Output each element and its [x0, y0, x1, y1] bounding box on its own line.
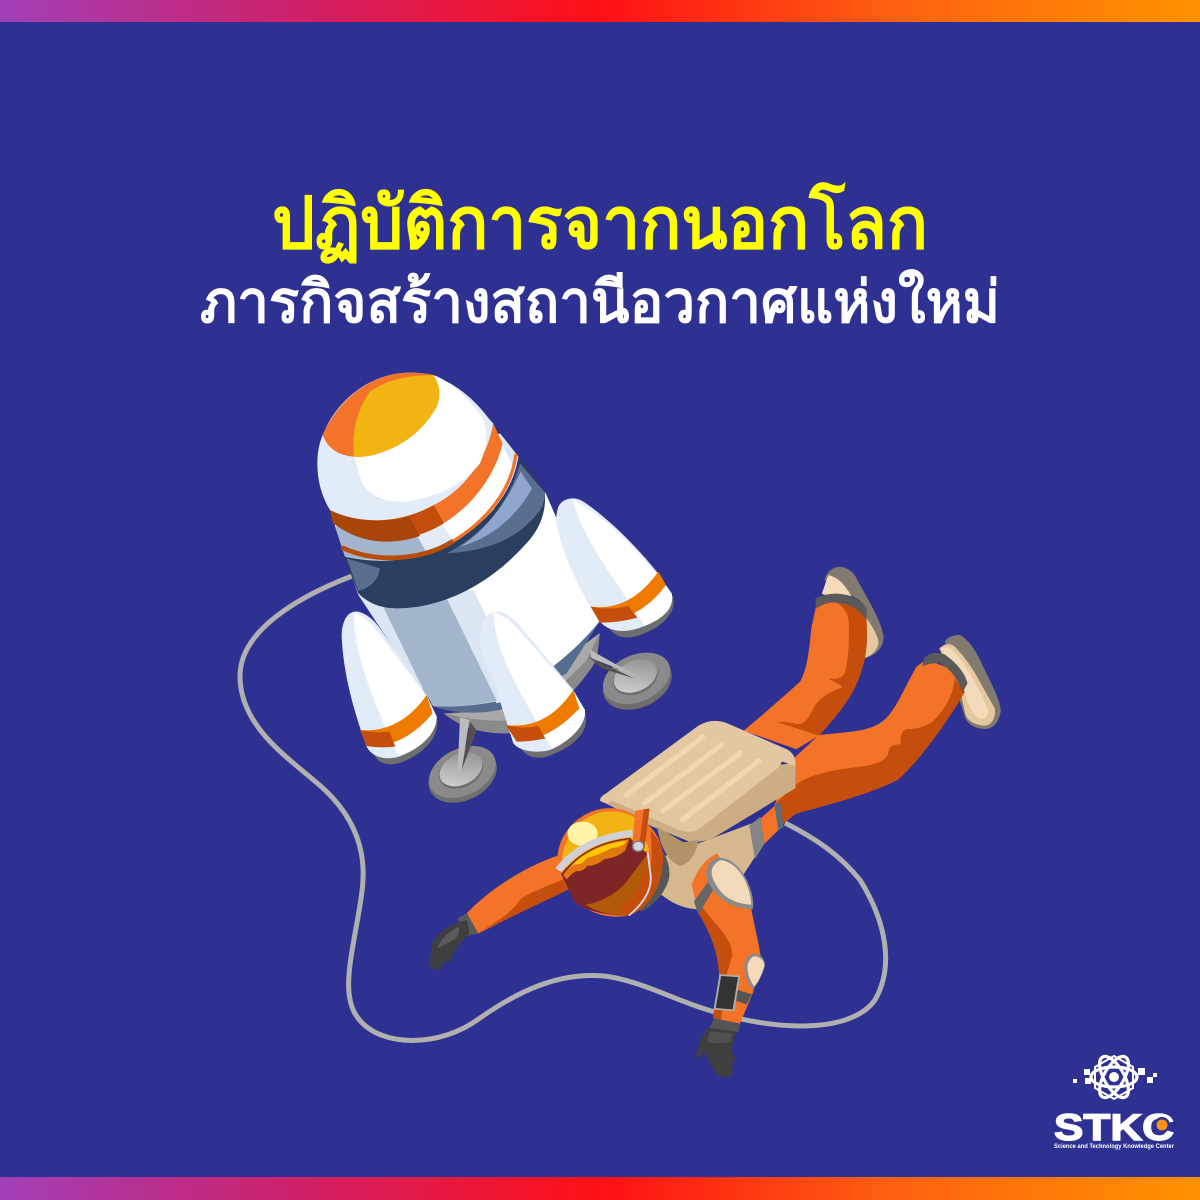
rocket hub highlight — [447, 633, 599, 721]
left cuff — [458, 913, 478, 936]
left glove highlight — [437, 927, 459, 949]
booster left — [342, 611, 437, 764]
booster middle — [480, 611, 586, 758]
left arm shadow — [476, 879, 569, 933]
helmet knob — [633, 841, 644, 851]
rocket collar shade — [335, 520, 427, 560]
rocket thin stripe orange — [453, 454, 516, 541]
visor edge shine — [619, 864, 650, 916]
rocket dome — [317, 373, 493, 520]
navy band shade — [447, 463, 545, 553]
logo orange dot — [1156, 1120, 1168, 1130]
rocket thin stripe dark — [342, 541, 453, 558]
leg one — [744, 602, 867, 749]
backpack underside — [657, 827, 698, 866]
tether cable — [240, 576, 886, 1040]
neck ring — [631, 851, 669, 912]
right arm — [692, 853, 761, 1024]
rocket — [317, 373, 680, 814]
rocket body blue shade — [367, 590, 497, 707]
helmet handle — [633, 808, 650, 847]
rocket body bottom rim — [430, 620, 601, 713]
landing foot left — [419, 717, 506, 814]
visor edge highlight — [629, 852, 651, 916]
rocket wide stripe dark — [330, 510, 420, 542]
booster right — [556, 498, 674, 638]
logo tagline: Science and Technology Knowledge Center — [1054, 1144, 1175, 1150]
right arm shadow — [697, 906, 732, 1020]
dome orange cap — [323, 373, 439, 457]
helmet handle shade — [639, 808, 650, 847]
wrist strap — [732, 989, 752, 1004]
elbow pad — [744, 954, 765, 989]
logo dot backing — [1154, 1117, 1170, 1133]
hip section — [761, 805, 783, 844]
bottom gradient bar — [0, 1177, 1200, 1200]
visor gold reflection — [569, 841, 627, 868]
top gradient bar — [0, 0, 1200, 22]
backpack side — [600, 763, 796, 842]
shoulder pad inner — [712, 860, 751, 905]
navy band — [343, 458, 545, 608]
navy band highlight — [460, 472, 532, 547]
wrist device — [715, 975, 739, 1010]
rocket collar pale — [408, 517, 454, 553]
subtitle: ภารกิจสร้างสถานีอวกาศแห่งใหม่ — [200, 268, 1000, 335]
rocket collar — [330, 433, 518, 561]
leg two shadow — [776, 678, 965, 825]
navy band left patch — [347, 558, 380, 591]
logo — [1054, 1052, 1175, 1150]
backpack top — [600, 721, 796, 832]
cuff one — [815, 594, 867, 620]
back foot one — [822, 567, 884, 659]
astronaut — [429, 567, 1001, 1078]
rocket body left edge — [345, 557, 430, 703]
leg two — [770, 660, 965, 825]
leg one shadow — [777, 602, 867, 736]
visor lower shine — [586, 854, 650, 916]
rocket wide stripe shade — [330, 505, 444, 540]
helmet rim — [558, 833, 633, 870]
left glove — [429, 920, 470, 971]
landing foot right — [588, 643, 680, 720]
back foot two — [939, 635, 1001, 729]
rocket body white — [345, 492, 601, 707]
title: ปฏิบัติการจากนอกโลก — [272, 180, 928, 264]
helmet — [557, 808, 663, 917]
logo wordmark: STKC — [1054, 1107, 1174, 1148]
visor orange reflection — [563, 839, 629, 879]
cuff two — [922, 653, 968, 692]
rocket base hub — [443, 633, 600, 733]
logo squares — [1073, 1068, 1157, 1084]
torso — [661, 824, 762, 910]
shoulder pad — [706, 857, 753, 909]
dome yellow cap — [353, 375, 439, 457]
right cuff — [710, 1018, 741, 1033]
visor — [561, 838, 650, 916]
torso strap — [749, 817, 764, 859]
logo atom — [1091, 1052, 1137, 1102]
left arm — [465, 856, 569, 933]
rocket wide stripe — [330, 423, 503, 540]
rocket collar right pale — [500, 433, 518, 467]
waist strap — [774, 803, 784, 830]
elbow pad inner — [747, 956, 764, 987]
backpack stripes — [626, 737, 759, 820]
right glove — [696, 1028, 736, 1078]
rocket body pale strip — [440, 590, 525, 703]
right glove highlight — [707, 1032, 732, 1043]
dome highlight — [354, 375, 486, 502]
shoulder strap — [694, 879, 714, 915]
